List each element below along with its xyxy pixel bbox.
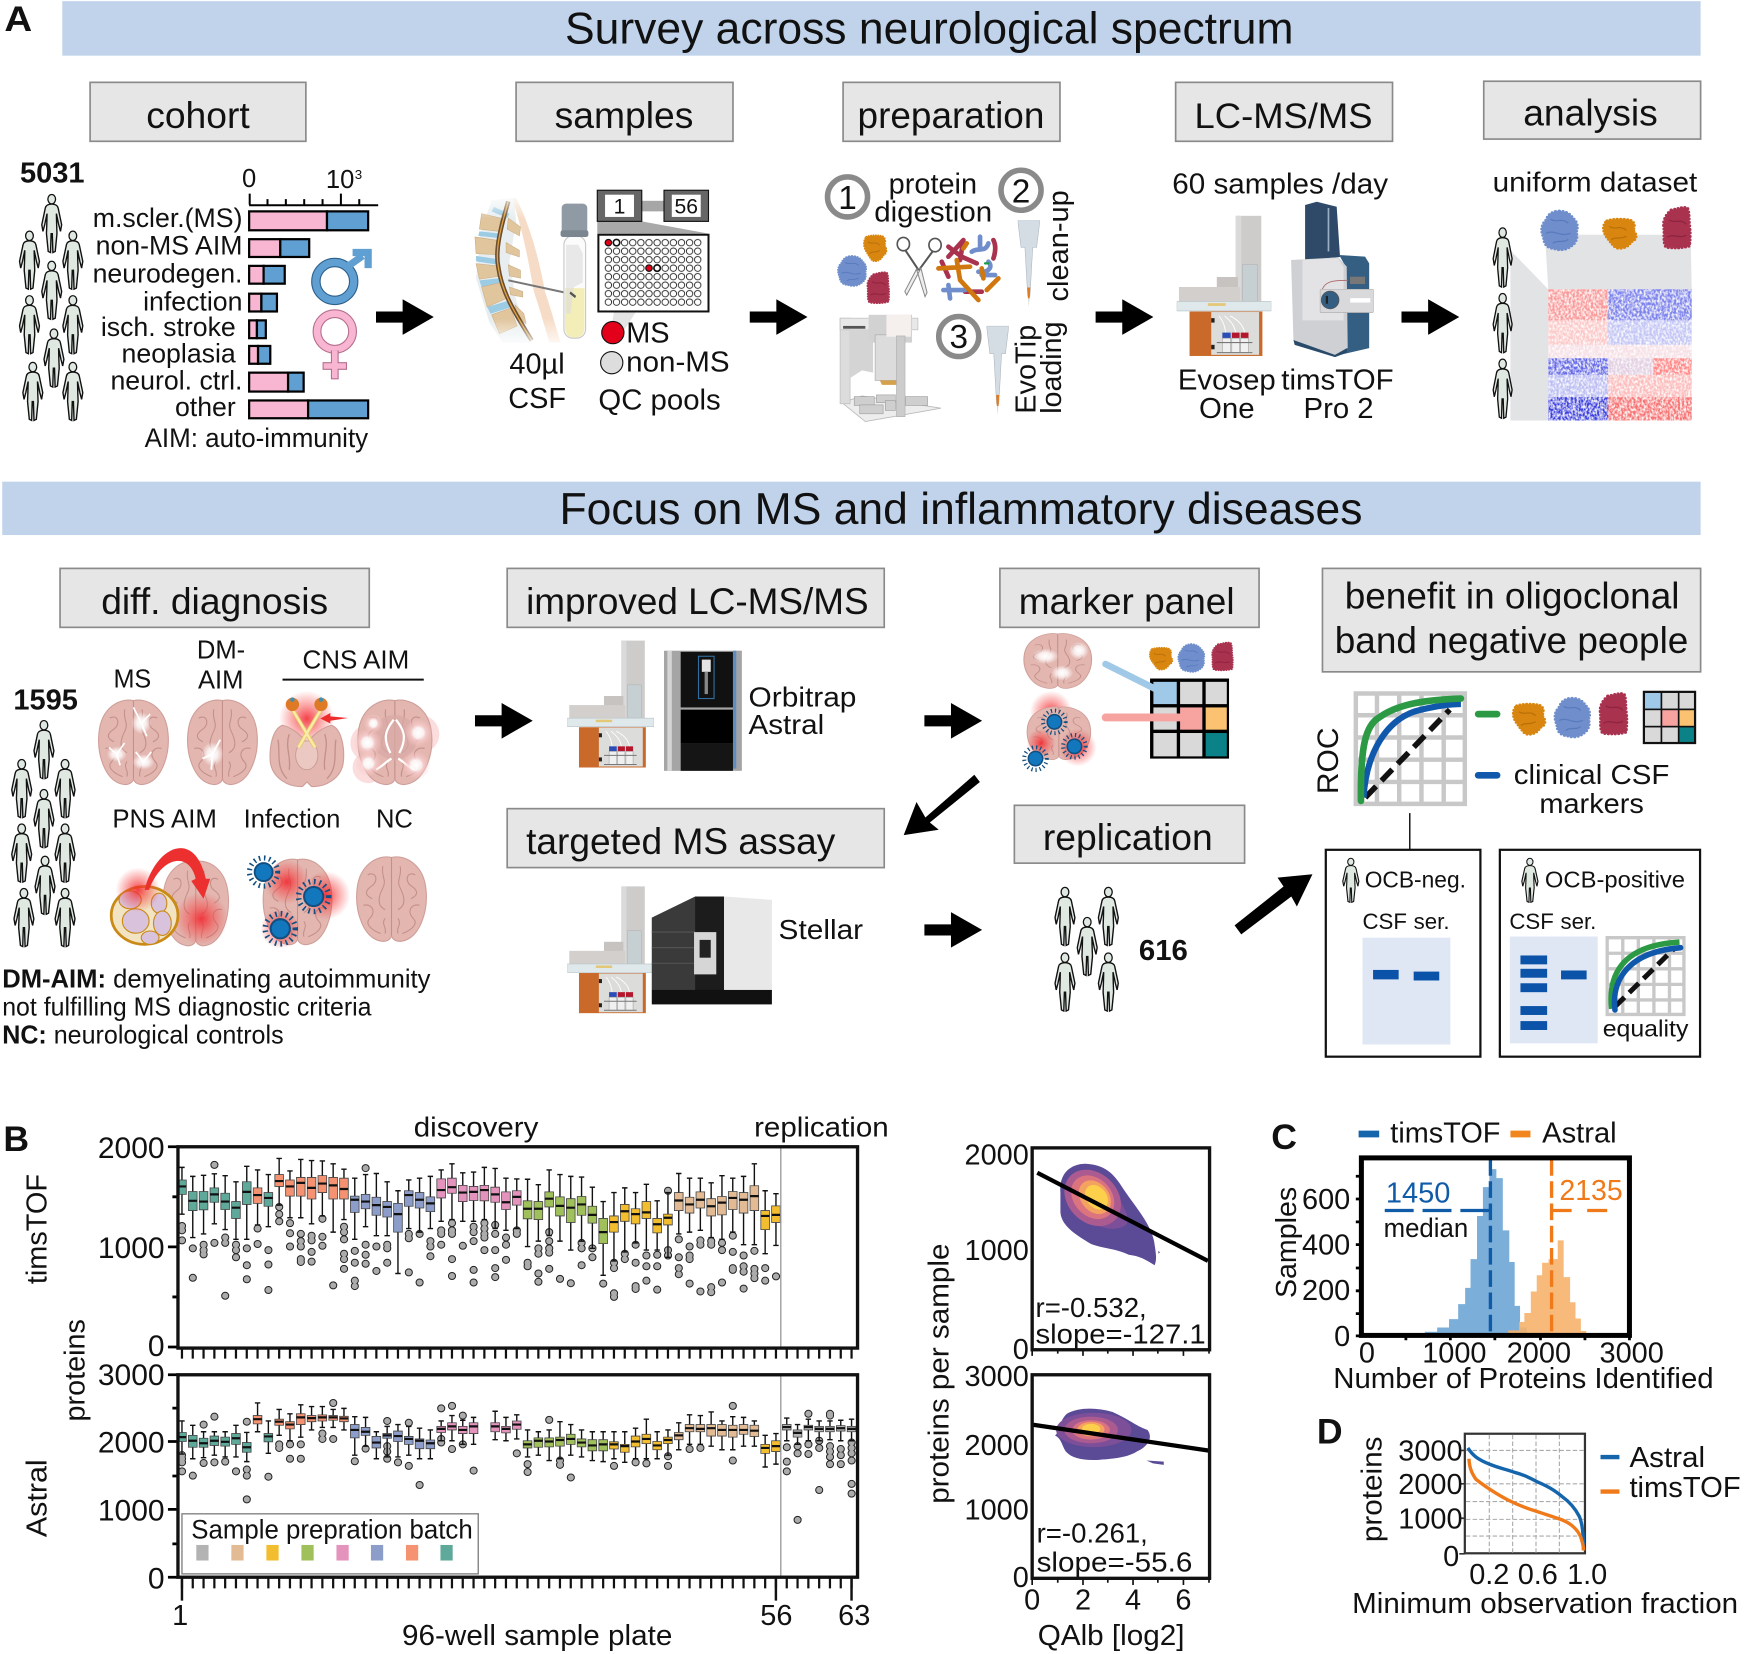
chart: protein count histogram: 2000 — [1507, 1338, 1571, 1370]
icon: tip clean-up — [1018, 220, 1040, 307]
text: EvoTip loading — [1010, 321, 1068, 414]
arrow — [475, 703, 533, 739]
axis labels: boxplot X: 96-well sample plate — [402, 1620, 672, 1652]
arrow: replication to benefit — [1235, 874, 1312, 934]
chart: ROC curve — [1312, 691, 1467, 806]
icon: tip EvoTip — [987, 326, 1009, 415]
text: Orbitrap Astral: Astral — [749, 709, 824, 740]
chart: QAlb density timsTOF — [965, 1140, 1210, 1366]
chart: protein count histogram: 400 — [1302, 1230, 1350, 1262]
chart: cohort bar chart: neurodegen. — [93, 259, 242, 289]
replication people and count: 616 — [1139, 935, 1188, 967]
panel: OCB-positive: ser. — [1560, 909, 1596, 934]
labels: instruments: Pro 2 — [1304, 393, 1374, 425]
chart: minimum observation fraction: 0 — [1443, 1541, 1459, 1573]
labels: diagnosis groups — [112, 636, 424, 834]
connector line — [1409, 813, 1411, 850]
heading: samples — [516, 82, 733, 141]
chart: minimum observation fraction: Minimum observation fraction — [1352, 1588, 1738, 1620]
preparation steps: 2 — [1012, 173, 1030, 210]
chart: protein count histogram: 3000 — [1600, 1338, 1664, 1370]
label: panel B: B — [3, 1119, 29, 1159]
axis labels: QAlb: QAlb [log2] — [1038, 1620, 1185, 1652]
preparation steps: 1 — [838, 180, 857, 217]
heading: cohort — [90, 82, 306, 141]
chart: cohort bar chart: other — [175, 392, 236, 422]
text: abbreviations: NC: neurological controls — [2, 1021, 284, 1049]
axis labels: boxplot Y — [22, 1174, 92, 1537]
arrow — [1096, 299, 1153, 335]
heading: improved LC-MS/MS: improved LC-MS/MS — [526, 581, 869, 622]
text: Stellar: Stellar — [779, 914, 863, 945]
axis labels: boxplot X: 1 — [172, 1600, 188, 1632]
heading: targeted MS assay: targeted MS assay — [526, 821, 836, 862]
brain: MS — [99, 700, 168, 785]
chart: cohort bar chart: 3 — [355, 167, 362, 182]
heading: improved LC-MS/MS — [507, 568, 884, 627]
chart: protein count histogram: 1000 — [1422, 1338, 1487, 1370]
illustration: 96-well plates: 56 — [675, 196, 698, 219]
panel: OCB-negative — [1326, 850, 1480, 1057]
icon: Evosep One — [1177, 216, 1271, 356]
axis labels: boxplot Y: timsTOF — [22, 1174, 54, 1284]
section header: focus: Focus on MS and inflammatory diseases — [559, 485, 1363, 534]
arrow — [1401, 299, 1459, 335]
section header: survey — [62, 1, 1701, 56]
chart: QAlb density Astral — [965, 1361, 1210, 1594]
icon: peptides — [938, 237, 998, 300]
illustration: 96-well plates: 1 — [614, 196, 625, 219]
legend: D — [1601, 1442, 1741, 1504]
preparation steps: digestion — [874, 196, 992, 228]
replication people and count — [1055, 887, 1188, 1011]
axis ticks: boxplot Y: 1000 — [98, 1232, 165, 1265]
panel: OCB-negative: ser. — [1414, 909, 1450, 934]
chart: timsTOF boxplots — [178, 1147, 858, 1354]
labels: instruments — [1178, 364, 1394, 425]
chart: protein count histogram: 200 — [1302, 1275, 1350, 1307]
chart: minimum observation fraction: 3000 — [1398, 1435, 1463, 1467]
axis labels: QAlb: 6 — [1175, 1584, 1191, 1616]
chart: minimum observation fraction — [1352, 1434, 1738, 1620]
legend: histogram: Astral — [1542, 1117, 1617, 1149]
heading: analysis: analysis — [1523, 92, 1658, 134]
chart: QAlb density Astral: 1000 — [965, 1494, 1029, 1526]
brain: neurological controls — [357, 857, 426, 941]
axis labels: QAlb: 4 — [1125, 1584, 1141, 1616]
axis labels: QAlb: 0 — [1024, 1584, 1040, 1616]
labels: instruments: One — [1199, 393, 1255, 425]
chart: cohort bar chart: isch. stroke — [101, 312, 236, 342]
cohort count and people — [20, 157, 85, 420]
text: discovery and replication labels: replication — [754, 1112, 889, 1143]
chart: QAlb density Astral: slope=-55.6 — [1037, 1547, 1192, 1578]
icon: liquid handling robot — [840, 315, 941, 422]
axis ticks: boxplot Y: 2000 — [98, 1427, 165, 1460]
chart: protein count histogram — [1271, 1158, 1714, 1395]
preparation steps: protein — [889, 169, 977, 201]
chart: cohort bar chart — [93, 165, 378, 453]
preparation steps: 3 — [949, 319, 968, 356]
brain: CNS AIM optic — [270, 691, 348, 786]
icon: male symbol — [316, 253, 368, 300]
panel: OCB-positive: equality — [1603, 1016, 1689, 1042]
arrow: marker panel to targeted assay — [904, 775, 980, 835]
heading: benefit in oligoclonal band negative people — [1322, 568, 1701, 672]
heading: LC-MS/MS: LC-MS/MS — [1195, 96, 1373, 136]
chart: protein count histogram: 1450 — [1386, 1177, 1450, 1209]
panel: OCB-negative: CSF — [1362, 909, 1407, 934]
text: Orbitrap Astral: Orbitrap — [749, 681, 856, 712]
text: clean-up: clean-up — [1043, 190, 1075, 301]
axis labels: boxplot Y: proteins — [60, 1319, 92, 1421]
text: EvoTip loading: loading — [1036, 321, 1068, 414]
text: abbreviations: not fulfilling MS diagnostic criteria — [2, 994, 372, 1022]
legend: sample preparation batch — [182, 1514, 478, 1574]
diagnosis cohort count and people: 1595 — [13, 685, 78, 717]
chart: QAlb density timsTOF: 0 — [1013, 1334, 1029, 1366]
chart: QAlb density timsTOF: 1000 — [965, 1235, 1029, 1267]
brain: CNS AIM lesions — [350, 700, 439, 785]
axis ticks: boxplot Y: 0 — [148, 1330, 165, 1363]
chart: cohort bar chart: neoplasia — [122, 339, 236, 369]
chart: protein count histogram: 0 — [1334, 1321, 1350, 1353]
chart: cohort bar chart: 0 — [242, 165, 256, 193]
label: panel C: C — [1271, 1117, 1297, 1157]
chart: minimum observation fraction: proteins — [1356, 1437, 1388, 1542]
section header: survey: Survey across neurological spectrum — [565, 4, 1294, 53]
heading: targeted MS assay — [507, 809, 884, 868]
heading: LC-MS/MS — [1176, 82, 1393, 141]
axis ticks: boxplot Y: 3000 — [98, 1359, 165, 1392]
text: CSF volume — [508, 349, 566, 415]
legend: ROC: clinical CSF — [1514, 759, 1669, 790]
chart: QAlb density Astral: 0 — [1013, 1562, 1029, 1594]
chart: cohort bar chart: 10 — [326, 166, 354, 194]
labels: instruments: timsTOF — [1281, 364, 1394, 396]
heading: samples: samples — [555, 94, 693, 136]
panel: OCB-negative: OCB-neg. — [1365, 867, 1466, 893]
arrow — [376, 299, 434, 335]
chart: cohort bar chart: infection — [143, 286, 242, 316]
chart: protein count histogram: 600 — [1302, 1184, 1350, 1216]
panel: OCB-positive: OCB-positive — [1545, 867, 1685, 893]
text: Orbitrap Astral — [749, 681, 856, 740]
heading: benefit in oligoclonal band negative people: benefit in oligoclonal — [1345, 574, 1679, 616]
text: CSF volume: CSF — [508, 383, 566, 415]
chart: minimum observation fraction: 1000 — [1398, 1503, 1463, 1535]
brain: infection — [249, 858, 350, 949]
labels: diagnosis groups: MS — [113, 665, 151, 693]
icon: timsTOF Pro 2 — [1291, 202, 1373, 357]
chart: cohort bar chart: non-MS AIM — [96, 231, 242, 261]
legend: sample preparation batch: Sample prepration batch — [191, 1514, 473, 1544]
text: uniform dataset: uniform dataset — [1493, 166, 1698, 197]
heading: preparation — [843, 82, 1060, 141]
panel: OCB-positive — [1500, 850, 1700, 1057]
chart: Astral boxplots — [178, 1375, 858, 1601]
heading: analysis — [1484, 81, 1701, 139]
heading: preparation: preparation — [858, 95, 1044, 136]
labels: diagnosis groups: Infection — [244, 806, 340, 834]
heading: marker panel: marker panel — [1019, 581, 1235, 622]
chart: QAlb density timsTOF: 2000 — [965, 1140, 1029, 1172]
labels: diagnosis groups: PNS AIM — [112, 806, 217, 834]
text: abbreviations: DM-AIM: demyelinating autoimmunity — [2, 966, 431, 994]
legend: sample types: non-MS — [626, 347, 730, 379]
chart: minimum observation fraction: 2000 — [1398, 1469, 1463, 1501]
icon: Evosep and Orbitrap Astral — [567, 641, 742, 771]
illustration: spine and CSF tube — [474, 198, 588, 345]
text: abbreviations — [2, 966, 431, 1049]
axis labels: boxplot X: 56 — [760, 1600, 792, 1632]
illustration: 96-well plates — [597, 190, 708, 339]
section header: focus — [2, 482, 1701, 535]
chart: protein count histogram: 0 — [1359, 1338, 1375, 1370]
labels: diagnosis groups: DM- — [197, 636, 245, 664]
arrow — [750, 299, 807, 335]
chart: QAlb density Astral: 2000 — [965, 1430, 1029, 1462]
label: panel D: D — [1317, 1412, 1343, 1452]
axis labels: boxplot X — [172, 1600, 870, 1652]
arrow — [924, 912, 982, 948]
chart: protein count histogram: Number of Proteins Identified — [1333, 1363, 1714, 1395]
legend: sample types — [598, 318, 730, 416]
panel: OCB-positive: CSF — [1509, 909, 1554, 934]
chart: minimum observation fraction: 1.0 — [1567, 1559, 1607, 1591]
marker panel illustration — [1024, 634, 1233, 770]
brain: PNS AIM with nerve — [111, 848, 229, 946]
legend: D: timsTOF — [1629, 1472, 1741, 1504]
preparation steps — [828, 169, 1041, 357]
axis labels: boxplot X: 63 — [838, 1600, 870, 1632]
chart: protein count histogram: median — [1384, 1213, 1468, 1243]
chart: QAlb density timsTOF: r=-0.532, — [1036, 1292, 1147, 1323]
analysis: dataset heatmap — [1493, 208, 1692, 420]
axis labels: QAlb: 2 — [1075, 1584, 1091, 1616]
chart: protein count histogram: 2135 — [1559, 1175, 1623, 1207]
heading: replication — [1014, 805, 1245, 863]
chart: cohort bar chart: neurol. ctrl. — [110, 365, 242, 395]
labels: diagnosis groups: CNS AIM — [303, 647, 409, 675]
labels: diagnosis groups: AIM — [198, 667, 243, 695]
label: panel A: A — [4, 0, 32, 39]
legend: sample types: MS — [626, 318, 670, 350]
text: CSF volume: 40µl — [509, 349, 565, 381]
icon: female symbol — [317, 314, 353, 379]
labels: instruments: Evosep — [1178, 364, 1276, 396]
icon: scissors — [897, 237, 941, 297]
chart: QAlb density Astral: 3000 — [965, 1361, 1029, 1393]
legend: ROC — [1478, 691, 1696, 819]
legend: D: Astral — [1629, 1442, 1705, 1474]
axis ticks: boxplot Y: 0 — [148, 1562, 165, 1595]
axis label: proteins per sample: proteins per sample — [924, 1244, 956, 1504]
chart: QAlb density timsTOF: slope=-127.1 — [1036, 1319, 1206, 1350]
diagnosis cohort count and people — [12, 685, 78, 947]
labels: diagnosis groups: NC — [376, 806, 413, 834]
axis ticks: boxplot Y: 1000 — [98, 1494, 165, 1527]
heading: diff. diagnosis: diff. diagnosis — [101, 581, 328, 622]
chart: minimum observation fraction: 0.2 — [1469, 1559, 1509, 1591]
chart: cohort bar chart: AIM: auto-immunity — [145, 423, 369, 453]
heading: diff. diagnosis — [60, 568, 369, 627]
legend: histogram: timsTOF — [1390, 1117, 1500, 1149]
axis labels: boxplot Y: Astral — [22, 1459, 54, 1537]
cohort count and people: 5031 — [20, 157, 85, 189]
brain: DM-AIM — [188, 700, 257, 785]
chart: minimum observation fraction: 0.6 — [1518, 1559, 1558, 1591]
icon: Evosep and Stellar — [567, 886, 772, 1013]
chart: QAlb density Astral: r=-0.261, — [1037, 1518, 1148, 1549]
chart: protein count histogram: Samples — [1271, 1187, 1303, 1298]
legend: histogram — [1359, 1117, 1617, 1149]
text: throughput: 60 samples /day — [1172, 169, 1389, 201]
legend: sample types: QC pools — [598, 384, 721, 416]
heading: marker panel — [1000, 568, 1259, 627]
heading: replication: replication — [1043, 816, 1213, 858]
heading: benefit in oligoclonal band negative people: band negative people — [1335, 619, 1688, 661]
text: EvoTip loading: EvoTip — [1011, 325, 1043, 414]
axis ticks: boxplot Y: 2000 — [98, 1132, 165, 1165]
arrow — [924, 703, 982, 739]
legend: ROC: markers — [1539, 788, 1644, 819]
text: discovery and replication labels — [414, 1112, 889, 1143]
text: discovery and replication labels: discovery — [414, 1112, 538, 1143]
chart: ROC curve: ROC — [1312, 727, 1345, 794]
chart: cohort bar chart: m.scler.(MS) — [93, 203, 242, 233]
axis ticks: boxplot Y — [98, 1132, 178, 1595]
heading: cohort: cohort — [146, 94, 250, 136]
axis labels: QAlb — [1024, 1584, 1191, 1652]
